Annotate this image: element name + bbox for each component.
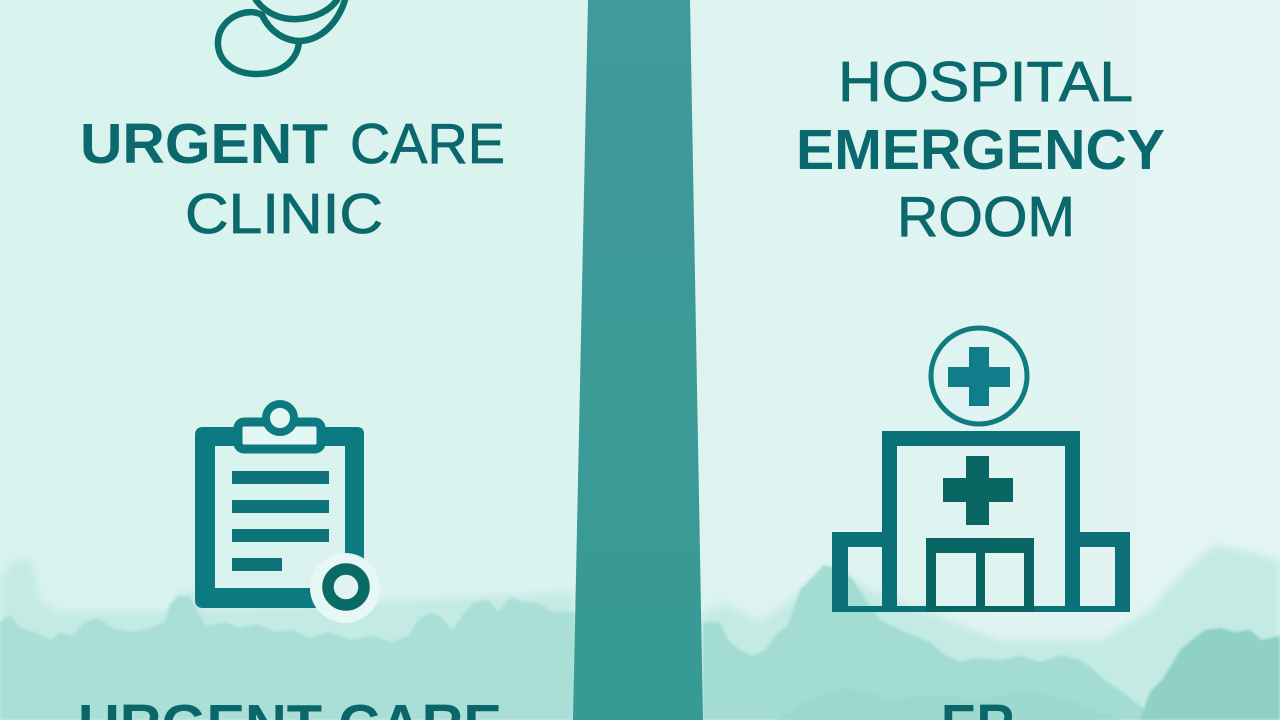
clipboard badge (310, 553, 380, 623)
forest silhouette: right, far haze (703, 545, 1280, 720)
central divider column (573, 0, 703, 720)
heading: hospital emergency room: HOSPITAL (838, 50, 1133, 114)
heading: urgent care clinic (80, 112, 505, 246)
forest silhouette: left (0, 596, 575, 720)
entrance doors (926, 538, 1034, 612)
heading: hospital emergency room: EMERGENCY (796, 118, 1165, 182)
heading: hospital emergency room (796, 50, 1165, 249)
heading: urgent care clinic: CARE (350, 112, 505, 176)
forest silhouette: right, near trees (775, 628, 1280, 720)
building outline (832, 431, 1130, 612)
rooftop cross sign (931, 328, 1027, 424)
forest silhouette: right, middle trees (703, 565, 1160, 720)
clipboard clip (238, 404, 321, 449)
icon: clipboard (195, 404, 380, 623)
forest silhouette: left, far haze (0, 560, 575, 720)
building cross (943, 456, 1013, 525)
heading: urgent care clinic: CLINIC (185, 182, 383, 246)
heading: urgent care clinic: URGENT (80, 112, 328, 176)
heading: hospital emergency room: ROOM (897, 185, 1075, 249)
clipboard lines (232, 471, 329, 571)
icon: stethoscope (218, 0, 345, 74)
icon: hospital building (832, 328, 1130, 612)
